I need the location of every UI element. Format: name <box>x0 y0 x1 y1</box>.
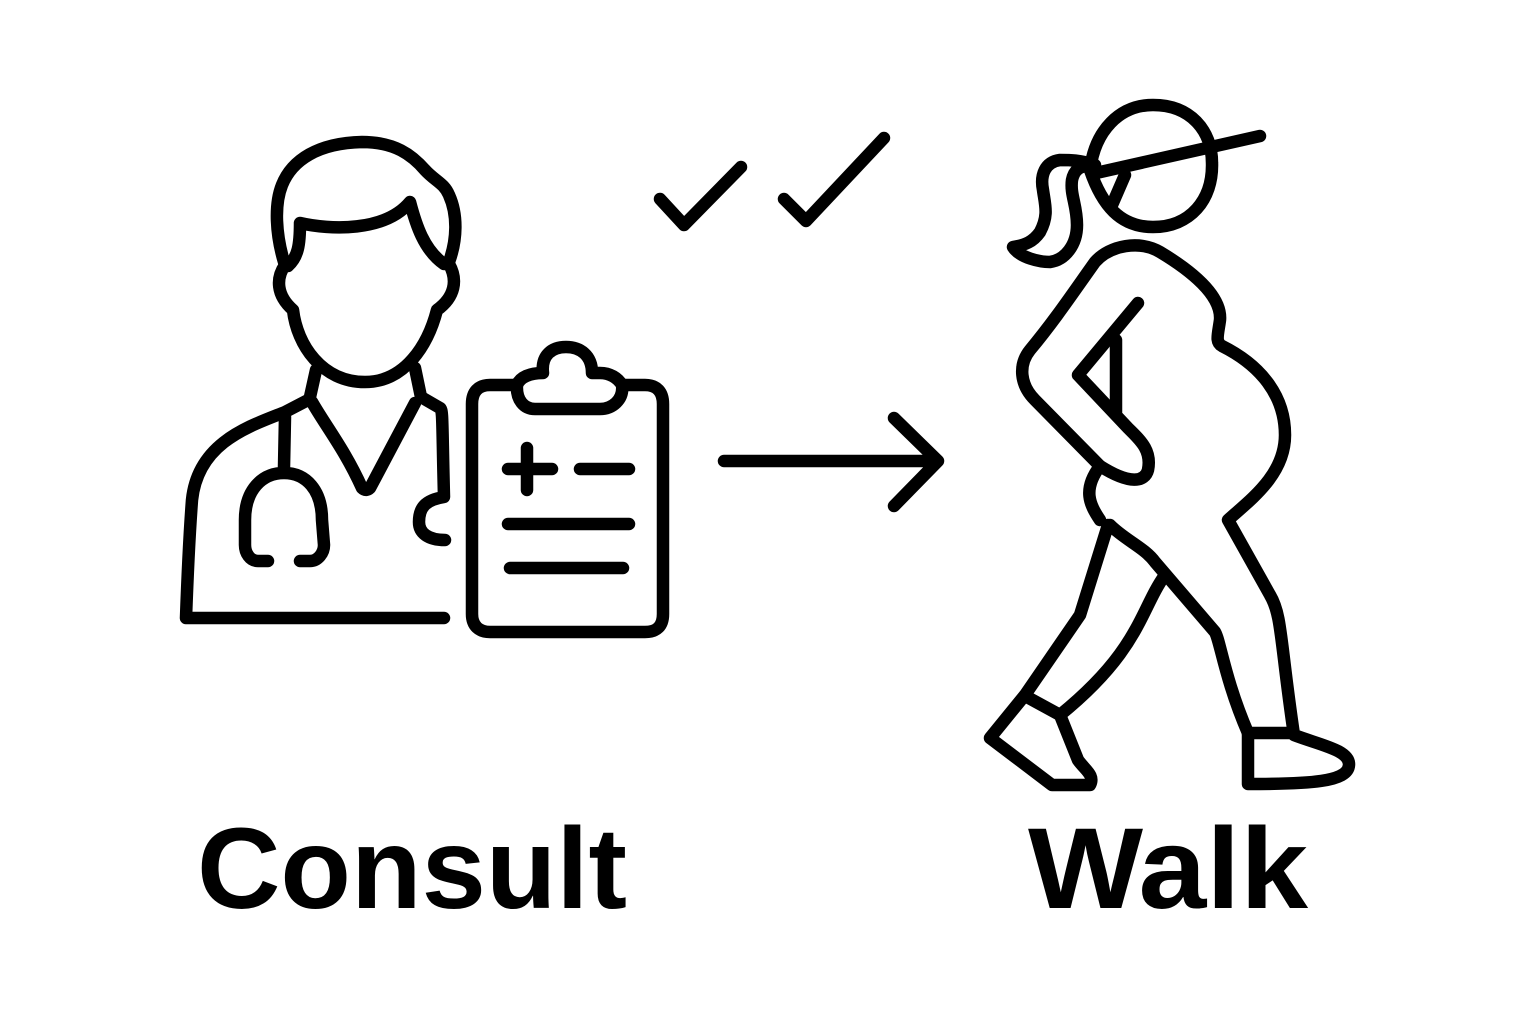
large check mark <box>784 138 884 221</box>
arrow shaft and head <box>724 418 938 506</box>
icon: doctor with stethoscope <box>186 142 455 618</box>
doctor face and ears <box>279 264 454 382</box>
hair detail <box>1112 175 1125 205</box>
ponytail <box>1013 160 1095 262</box>
small check mark <box>660 167 741 225</box>
arrow <box>724 418 938 506</box>
inner thigh and back leg <box>990 525 1248 785</box>
back, belly and front leg <box>1022 245 1349 784</box>
stethoscope <box>245 417 324 561</box>
check marks <box>660 138 884 225</box>
label: Walk: Walk <box>1028 805 1309 933</box>
head <box>1090 105 1212 227</box>
headband <box>1096 136 1260 173</box>
clipboard lines <box>508 469 629 568</box>
arm inner line <box>1110 340 1122 412</box>
doctor hair <box>277 142 455 262</box>
doctor torso <box>186 397 445 618</box>
icon: pregnant woman walking <box>990 105 1349 785</box>
clipboard plus sign <box>508 448 552 490</box>
clipboard clip <box>517 347 622 409</box>
arm <box>1078 303 1149 480</box>
icon: clipboard <box>472 347 663 632</box>
doctor hair fringe <box>288 202 444 266</box>
doctor collar <box>312 402 415 490</box>
label: Consult: Consult <box>197 805 627 933</box>
clipboard board <box>472 385 663 632</box>
doctor neck <box>310 368 421 397</box>
